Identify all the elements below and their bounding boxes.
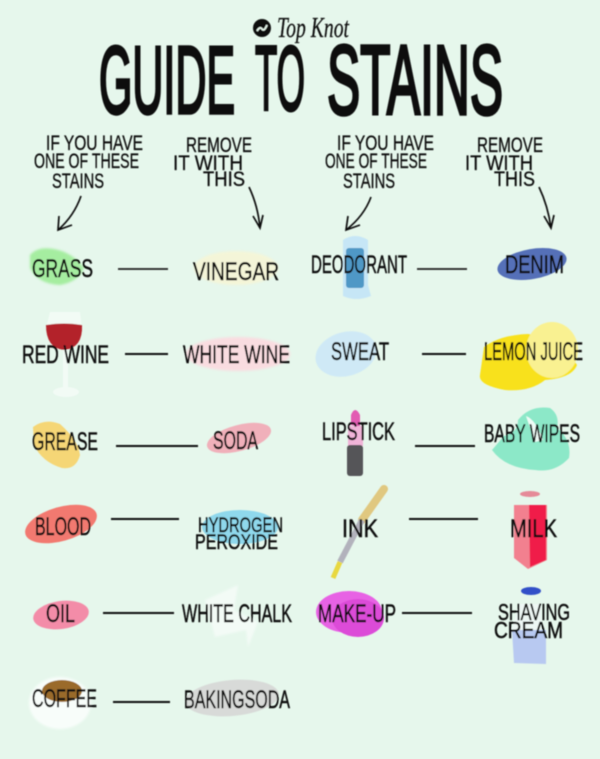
connector (113, 701, 170, 703)
connector (402, 612, 472, 614)
brand logo (253, 19, 271, 37)
white wine swatch (186, 337, 290, 371)
label vinegar: VINEGAR (193, 258, 279, 286)
connector (118, 268, 168, 270)
column header: remove it with this: REMOVE (186, 134, 252, 157)
label shaving cream (494, 599, 570, 643)
row: ink to milk (333, 489, 557, 578)
label white chalk: WHITE CHALK (182, 600, 292, 628)
label hydrogen peroxide (195, 514, 283, 554)
column header: if you have one of these stains: ONE OF THESE (34, 150, 139, 173)
title: TO (255, 28, 305, 130)
column header: if you have one of these stains (34, 132, 143, 193)
row: coffee to baking soda (29, 676, 290, 729)
label oil: OIL (46, 600, 75, 628)
connector (417, 268, 467, 270)
column header: remove it with this (173, 134, 252, 191)
connector (409, 518, 478, 520)
row: deodorant to denim (311, 236, 569, 299)
coffee swatch (29, 677, 91, 729)
label milk: MILK (510, 515, 557, 543)
column header: if you have one of these stains: STAINS (52, 170, 104, 193)
sweat swatch (310, 325, 382, 383)
label shaving cream: CREAM (494, 617, 563, 643)
icon: milk carton (514, 491, 547, 569)
connector (125, 353, 168, 355)
column header: remove it with this, right: REMOVE (477, 134, 543, 157)
column header: if you have one of these stains, right: ONE OF THESE (325, 150, 427, 173)
grease swatch (33, 422, 80, 468)
label baking soda: BAKINGSODA (184, 686, 290, 714)
label hydrogen peroxide: HYDROGEN (198, 514, 283, 537)
label blood: BLOOD (35, 513, 91, 541)
label lipstick: LIPSTICK (322, 418, 395, 446)
denim swatch (495, 243, 569, 285)
icon: lipstick (347, 410, 363, 476)
column header: remove it with this: THIS (203, 168, 245, 191)
label shaving cream: SHAVING (498, 599, 570, 625)
vinegar swatch (194, 251, 278, 285)
arrow 1 (58, 196, 81, 230)
column header: if you have one of these stains, right: STAINS (343, 170, 395, 193)
arrow 3 (346, 197, 371, 230)
icon: shaving cream bottle (511, 587, 546, 664)
label deodorant: DEODORANT (311, 251, 407, 279)
brand name: Top Knot (277, 12, 350, 44)
baby wipes swatch (492, 408, 570, 470)
icon: deodorant (343, 236, 371, 299)
column header: if you have one of these stains, right (325, 132, 434, 193)
label grease: GREASE (32, 428, 98, 456)
label sweat: SWEAT (331, 338, 389, 366)
row: red wine to white wine (22, 312, 290, 397)
title: GUIDE (99, 27, 235, 134)
oil swatch (31, 597, 91, 633)
label ink: INK (342, 515, 378, 543)
row: blood to hydrogen peroxide (21, 497, 283, 554)
connector (116, 445, 198, 447)
column header: if you have one of these stains, right: IF YOU HAVE (337, 132, 434, 155)
connector (111, 518, 179, 520)
soda swatch (204, 417, 274, 459)
grass swatch (30, 248, 84, 285)
column header: if you have one of these stains: IF YOU HAVE (46, 132, 143, 155)
lemon swatch (480, 322, 578, 390)
row: grease to soda (32, 417, 274, 468)
blood swatch (21, 497, 101, 551)
white chalk swatch (205, 585, 258, 647)
label grass: GRASS (32, 255, 93, 283)
arrow 2 (249, 187, 263, 228)
hydrogen peroxide swatch (202, 510, 278, 544)
icon: pen (333, 489, 384, 578)
row: grass to vinegar (30, 248, 279, 286)
arrow 4 (539, 187, 554, 228)
label soda: SODA (213, 427, 258, 455)
row: sweat to lemon juice (310, 322, 583, 390)
label hydrogen peroxide: PEROXIDE (195, 531, 278, 554)
column header: remove it with this, right: THIS (494, 168, 535, 191)
column header: remove it with this: IT WITH (173, 152, 243, 175)
connector (422, 353, 466, 355)
row: make-up to shaving cream (316, 587, 570, 664)
label denim: DENIM (505, 251, 564, 279)
label make-up: MAKE-UP (318, 600, 396, 628)
make-up swatch (316, 591, 384, 637)
label coffee: COFFEE (32, 685, 97, 713)
connector (415, 445, 475, 447)
row: oil to white chalk (31, 585, 292, 647)
row: lipstick to baby wipes (322, 408, 580, 476)
label red wine: RED WINE (22, 341, 109, 369)
connector (103, 612, 174, 614)
column header: remove it with this, right: IT WITH (465, 152, 533, 175)
baking soda swatch (184, 676, 280, 720)
label white wine: WHITE WINE (183, 341, 290, 369)
icon: wine glass (46, 312, 82, 397)
column header: remove it with this, right (465, 134, 543, 191)
